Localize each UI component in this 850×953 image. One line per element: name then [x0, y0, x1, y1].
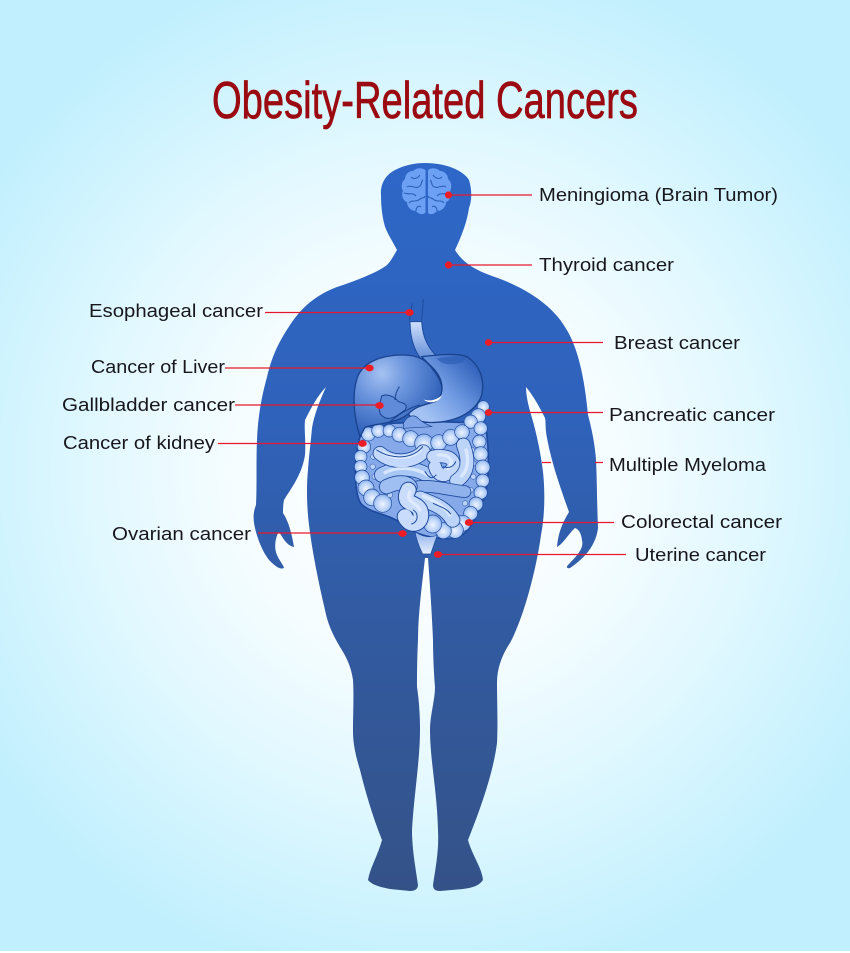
colon inner chain	[370, 447, 476, 523]
callout: liver	[91, 357, 374, 377]
callout: esophageal	[89, 301, 414, 321]
stomach highlight	[423, 395, 442, 402]
icon: liver	[354, 355, 442, 437]
callout: breast: Breast cancer	[614, 333, 740, 353]
title: Obesity-Related Cancers	[212, 72, 638, 130]
body silhouette	[254, 163, 598, 891]
colon haustra	[354, 401, 490, 539]
callout: kidney	[63, 433, 367, 453]
small intestine tubes	[377, 445, 468, 524]
callout: liver: Cancer of Liver	[91, 357, 225, 377]
callout: kidney: Cancer of kidney	[63, 433, 215, 453]
callout: thyroid: Thyroid cancer	[539, 255, 674, 275]
callout: colorectal	[465, 512, 782, 532]
callout: ovarian	[112, 524, 407, 544]
callout: uterine	[434, 545, 766, 565]
icon: esophagus	[409, 299, 443, 366]
callout: thyroid	[445, 255, 674, 275]
stomach shading	[437, 356, 466, 364]
icon: rectum	[415, 532, 437, 554]
icon: intestines	[354, 401, 490, 539]
icon: gallbladder and pancreas	[379, 387, 432, 428]
callout: gallbladder: Gallbladder cancer	[62, 395, 235, 415]
callout: breast	[485, 333, 740, 353]
callout: colorectal: Colorectal cancer	[621, 512, 782, 532]
icon: brain	[402, 168, 451, 214]
callout: meningioma	[445, 185, 778, 205]
callout: pancreatic: Pancreatic cancer	[609, 405, 775, 425]
callout: pancreatic	[485, 405, 775, 425]
callout: gallbladder	[62, 395, 384, 415]
callout: ovarian: Ovarian cancer	[112, 524, 251, 544]
icon: stomach	[408, 354, 483, 423]
callout: meningioma: Meningioma (Brain Tumor)	[539, 185, 778, 205]
callout: esophageal: Esophageal cancer	[89, 301, 263, 321]
organs: digestive system	[354, 299, 490, 554]
callout: uterine: Uterine cancer	[635, 545, 766, 565]
callout: multiple myeloma: Multiple Myeloma	[609, 455, 767, 475]
